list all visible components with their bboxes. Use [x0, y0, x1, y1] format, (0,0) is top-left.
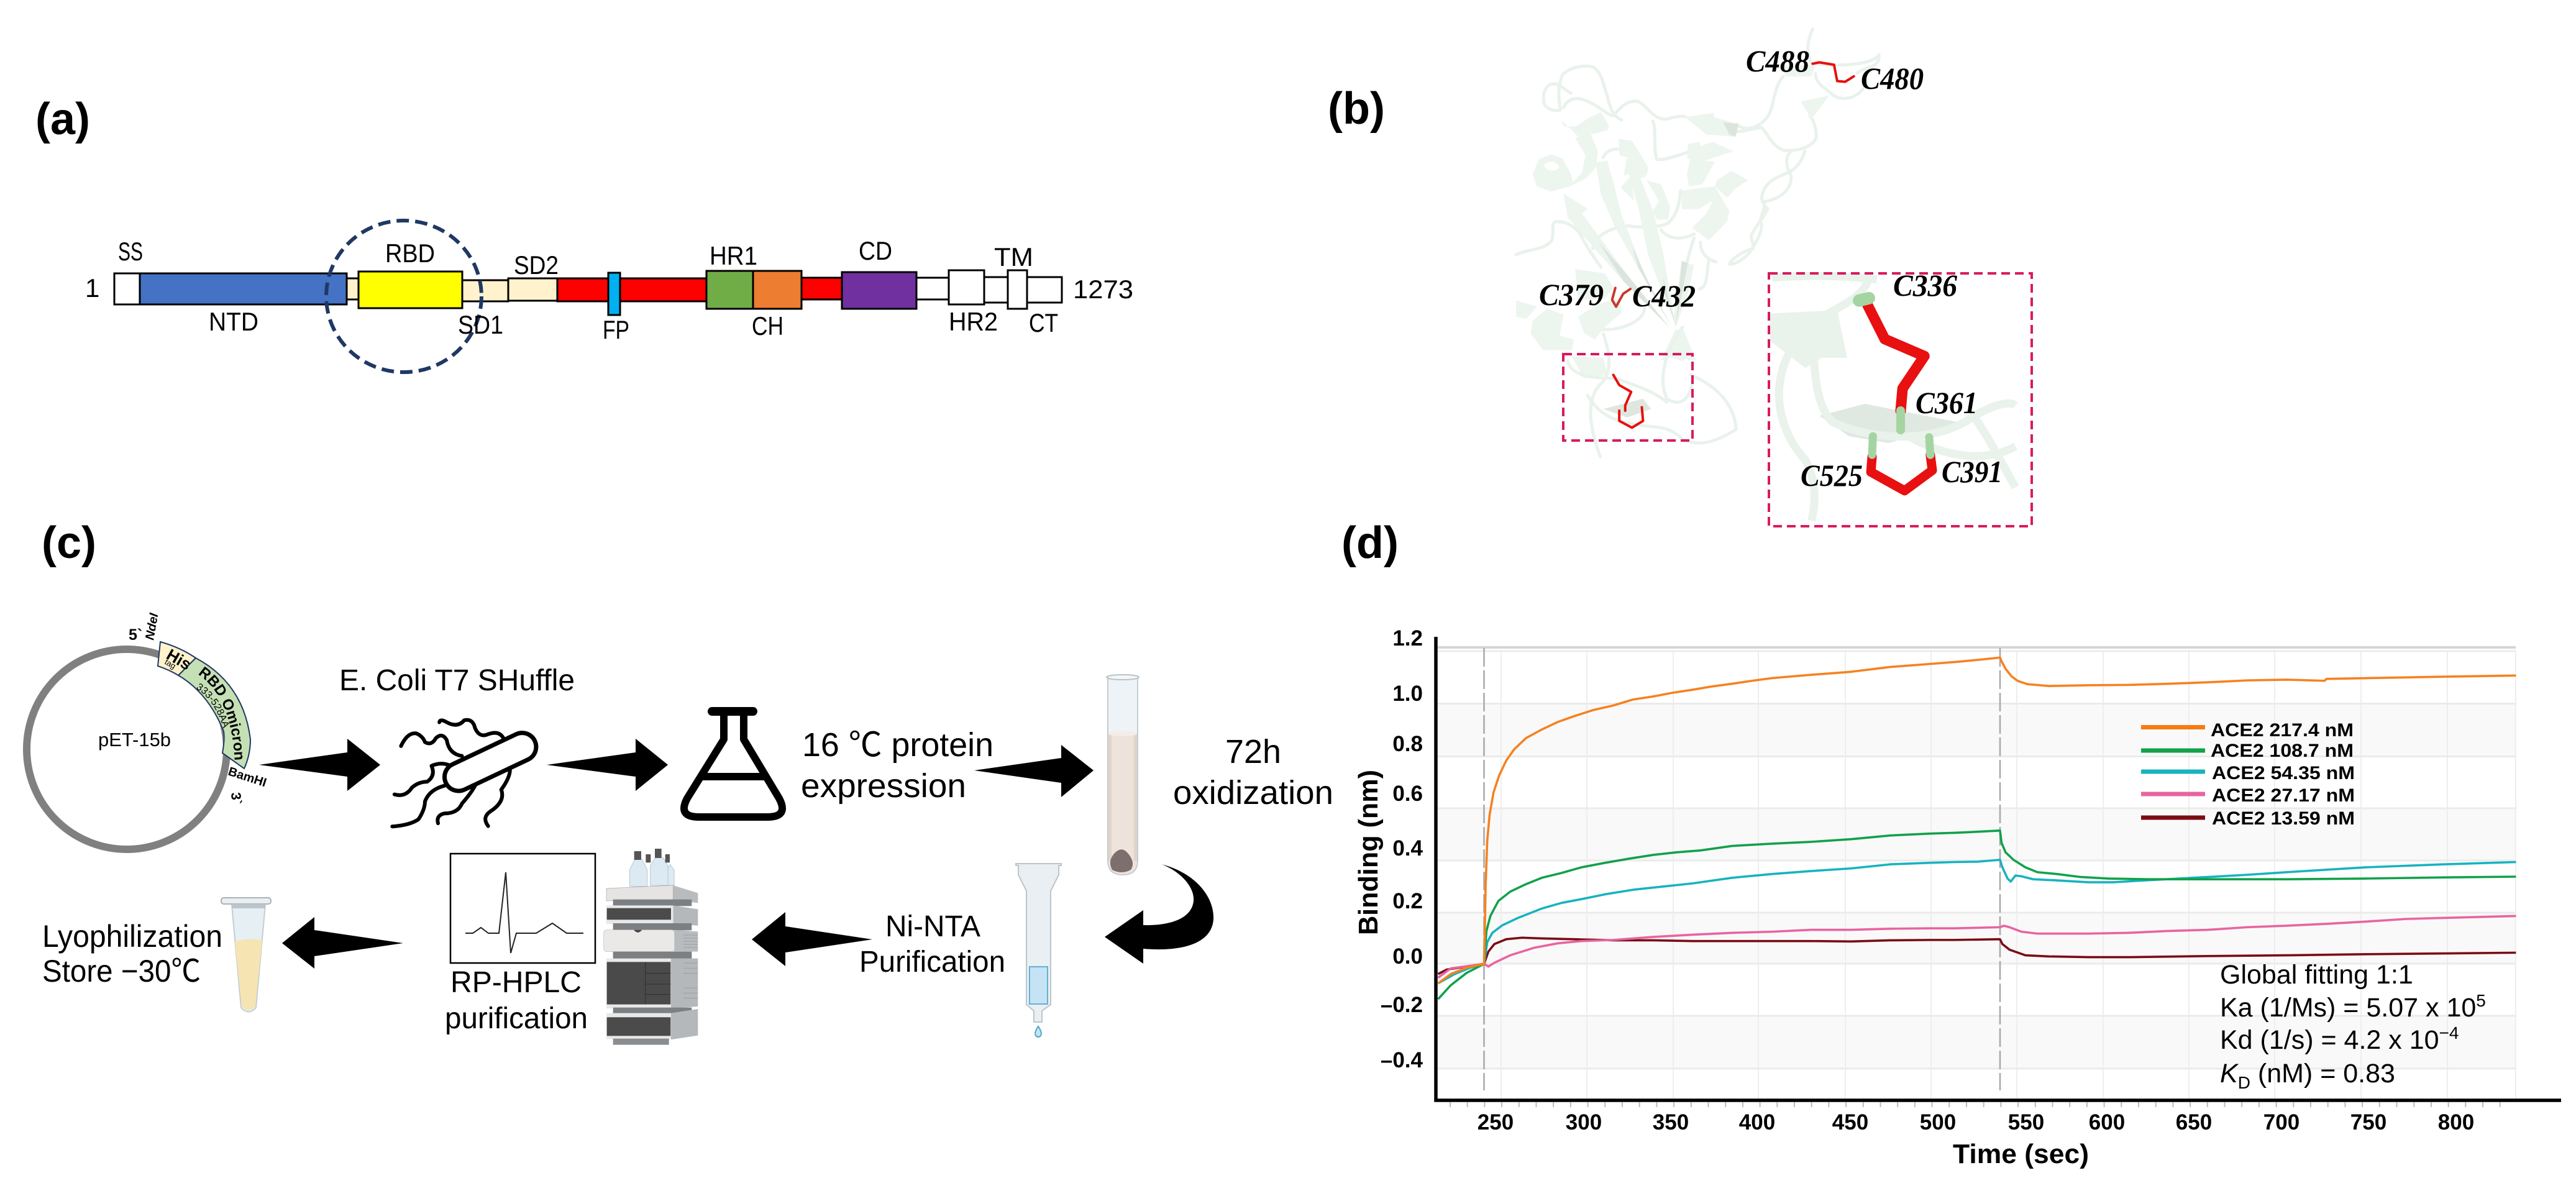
residue labels: C480 [1861, 61, 1924, 96]
text: Lyophilization Store -30C: Lyophilization [42, 919, 222, 954]
y axis labels: 1.2 [1392, 626, 1423, 650]
residue labels: C336 [1893, 268, 1957, 303]
text: 16 C protein expression [801, 726, 993, 805]
text: Ni-NTA Purification: Purification [859, 946, 1005, 979]
residue labels: C379 [1539, 277, 1604, 312]
plasmid map: pET-15b [98, 729, 171, 751]
sensorgram curves [1438, 657, 2516, 999]
residue labels: C391 [1942, 454, 2003, 489]
chromatogram box [450, 854, 595, 963]
legend [2141, 720, 2355, 829]
y axis labels: 1.0 [1392, 682, 1423, 706]
fitting parameters text: D [2238, 1073, 2250, 1092]
curve: ACE2 27.17 nM [1438, 916, 2516, 978]
curve: ACE2 108.7 nM [1438, 831, 2516, 999]
arrow: E. coli to flask [547, 739, 668, 791]
domain labels: SD1 [458, 310, 503, 339]
domain labels: CD [859, 236, 892, 265]
plasmid map: 5` [129, 626, 142, 644]
text: Ni-NTA Purification: Ni-NTA [885, 910, 980, 943]
x axis labels: 800 [2438, 1110, 2474, 1134]
panel: (b) RBD structure with disulfide bonds [1328, 29, 2032, 526]
y axis labels: 0.6 [1392, 782, 1423, 806]
fitting parameters text: Global fitting 1:1 [2220, 960, 2413, 990]
domain labels: NTD [209, 307, 258, 336]
text: Ni-NTA Purification [859, 910, 1005, 979]
x axis labels: 450 [1832, 1110, 1868, 1134]
dashed circle highlighting RBD [326, 221, 482, 372]
legend: ACE2 108.7 nM [2211, 741, 2354, 761]
y axis labels: 0.8 [1392, 732, 1423, 756]
minor x ticks [1450, 1102, 2516, 1107]
axes [1436, 637, 2561, 1100]
domain labels: SD2 [514, 250, 559, 280]
text: E. Coli T7 SHuffle: E. Coli T7 SHuffle [339, 664, 575, 697]
text: 72h oxidization: 72h [1225, 733, 1281, 770]
plasmid map: His [163, 645, 194, 673]
y axis labels: 0.4 [1392, 836, 1423, 860]
domain labels: HR1 [710, 241, 757, 270]
y axis labels: 0.0 [1392, 944, 1423, 969]
panel: (a) spike protein domain map [35, 94, 1133, 372]
icon: E. coli bacterium [392, 720, 522, 826]
fitting parameters text [2220, 960, 2486, 1092]
heading: (d): (d) [1341, 518, 1399, 568]
arrow: plasmid to E. coli [259, 739, 380, 791]
domain labels: SS [118, 237, 143, 266]
arrow: curved tube to column [1105, 864, 1213, 964]
text: Lyophilization Store -30C: Store −30℃ [42, 954, 201, 988]
text: Lyophilization Store -30C [42, 919, 222, 988]
domain labels [85, 236, 1133, 344]
x axis labels: 700 [2263, 1110, 2300, 1134]
residue labels: C432 [1632, 278, 1696, 313]
x axis labels: 350 [1653, 1110, 1689, 1134]
icon: test tube with pellet [1107, 675, 1139, 875]
domain labels: RBD [385, 239, 435, 268]
domain labels: FP [603, 315, 629, 344]
plasmid map: RBD Omicron [199, 666, 242, 760]
legend: ACE2 27.17 nM [2212, 785, 2355, 806]
curve: ACE2 217.4 nM [1438, 657, 2516, 984]
domain labels: CH [752, 311, 783, 340]
residue labels: C488 [1746, 43, 1809, 78]
text: RP-HPLC purification [445, 966, 588, 1035]
protein ribbon: lower loops [1568, 29, 1879, 457]
icon: Ni-NTA column [1016, 864, 1061, 1037]
text: RP-HPLC purification: RP-HPLC [450, 966, 582, 999]
fitting parameters text: 5 [2476, 991, 2486, 1010]
y axis title: Binding (nm) [1353, 770, 1384, 935]
x axis labels: 500 [1920, 1110, 1956, 1134]
disulfide bonds [1612, 62, 1932, 491]
legend: ACE2 54.35 nM [2212, 763, 2355, 783]
y axis labels: 0.2 [1392, 889, 1423, 913]
protein ribbon: upper body [1516, 66, 1816, 360]
heading: (b): (b) [1328, 84, 1385, 134]
text: 16 C protein expression: expression [801, 767, 966, 805]
x axis labels: 250 [1478, 1110, 1514, 1134]
fitting parameters text: Kd (1/s) = 4.2 x 10 [2220, 1025, 2439, 1055]
y axis labels: –0.4 [1381, 1048, 1423, 1072]
chart background bands and grid [1437, 647, 2516, 1100]
text: 16 C protein expression: 16 ℃ protein [802, 726, 993, 764]
curve: ACE2 13.59 nM [1438, 938, 2516, 974]
x axis labels: 650 [2176, 1110, 2212, 1134]
text: 72h oxidization: oxidization [1173, 774, 1333, 811]
x axis labels: 600 [2089, 1110, 2125, 1134]
text: RP-HPLC purification: purification [445, 1002, 588, 1035]
arrow: HPLC to lyophilization [282, 917, 403, 969]
legend: ACE2 13.59 nM [2212, 808, 2355, 829]
y axis labels [1381, 626, 1423, 1072]
text: 72h oxidization [1173, 733, 1333, 811]
x axis labels: 300 [1566, 1110, 1602, 1134]
arrow: flask to tube [974, 745, 1094, 797]
heading: (a): (a) [35, 94, 90, 144]
domain labels: 1273 [1073, 275, 1133, 304]
plasmid map: 3` [228, 792, 245, 805]
domain labels: HR2 [949, 307, 998, 336]
fitting parameters text: Ka (1/Ms) = 5.07 x 10 [2220, 993, 2476, 1023]
x axis labels [1478, 1110, 2474, 1134]
curve: ACE2 54.35 nM [1438, 860, 2516, 984]
fitting parameters text: (nM) = 0.83 [2250, 1059, 2395, 1089]
icon: microtube with powder [221, 898, 271, 1011]
x axis labels: 400 [1739, 1110, 1775, 1134]
residue labels: C525 [1801, 458, 1863, 493]
icon: flask [684, 711, 782, 817]
plasmid map: 333-528AA [196, 683, 229, 728]
heading: (c): (c) [42, 518, 96, 568]
domain labels: CT [1029, 308, 1058, 337]
domain bar [114, 270, 1062, 315]
domain labels: TM [994, 242, 1033, 272]
panel: (c) production workflow [23, 518, 1333, 1045]
domain labels: 1 [85, 273, 99, 303]
plasmid map: NdeI [143, 612, 162, 641]
fitting parameters text: K [2220, 1059, 2239, 1089]
residue labels: C361 [1916, 385, 1978, 420]
plasmid map: BamHI [226, 765, 268, 790]
panel: (d) binding sensorgram [1341, 518, 2561, 1169]
y axis labels: –0.2 [1381, 993, 1423, 1017]
x axis labels: 750 [2350, 1110, 2386, 1134]
legend: ACE2 217.4 nM [2211, 720, 2354, 741]
inset magnified ribbon [1770, 276, 2016, 521]
x axis title: Time (sec) [1953, 1139, 2089, 1169]
icon: HPLC instrument stack [604, 849, 698, 1045]
plasmid map [23, 612, 268, 853]
x axis labels: 550 [2008, 1110, 2044, 1134]
plasmid map: tag [163, 657, 178, 671]
residue labels [1539, 43, 2003, 493]
dashed selection boxes [1563, 273, 2032, 526]
fitting parameters text: −4 [2439, 1023, 2459, 1043]
arrow: column to HPLC [752, 912, 872, 966]
